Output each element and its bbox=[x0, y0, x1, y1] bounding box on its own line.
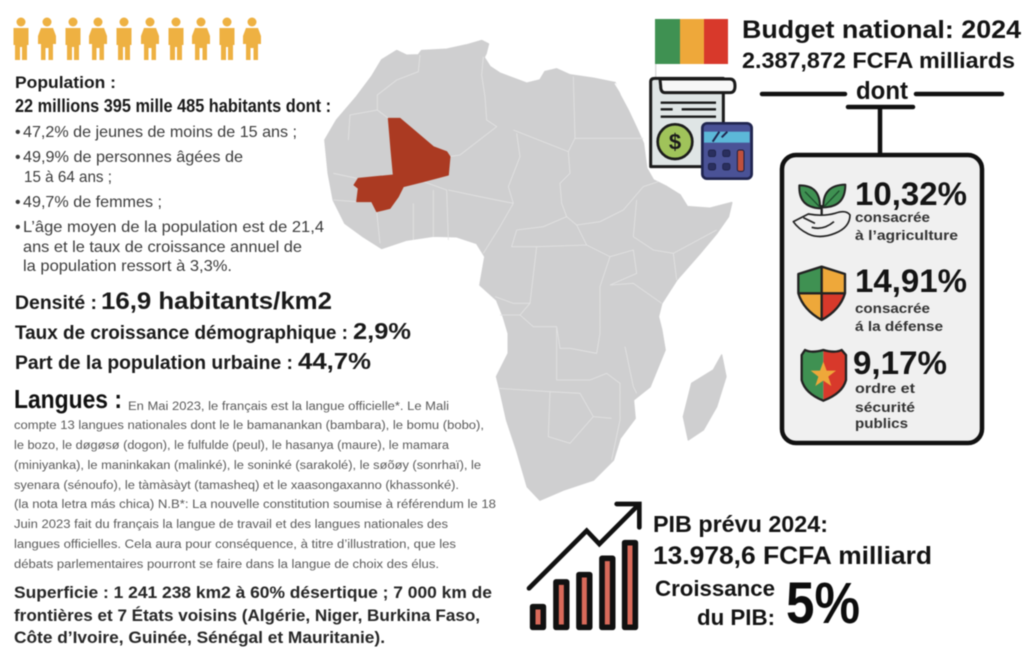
text block: superficie: Superficie : 1 241 238 km2 à 60% désertique ; 7 000 km de bbox=[14, 583, 492, 602]
icon: man bbox=[220, 18, 234, 60]
text block: population: 49,9% de personnes âgées de bbox=[23, 149, 243, 166]
stat: agriculture bbox=[855, 176, 967, 243]
icon: man bbox=[168, 18, 184, 60]
stat: security: ordre et bbox=[855, 380, 915, 396]
text block: langues: En Mai 2023, le français est la langue officielle*. Le Mali bbox=[128, 401, 449, 413]
text block: langues: débats parlementaires pourront se faire dans la langue de choix des élus. bbox=[14, 559, 439, 571]
stat: agriculture: consacrée bbox=[855, 209, 930, 225]
icon: man bbox=[14, 18, 28, 60]
icon: defense shield bbox=[798, 267, 845, 320]
text block: superficie: frontières et 7 États voisins (Algérie, Niger, Burkina Faso, bbox=[14, 606, 480, 625]
icon: woman bbox=[192, 18, 210, 60]
heading: budget national: 2.387,872 FCFA milliards bbox=[742, 48, 1015, 73]
stat: defense: consacrée bbox=[855, 300, 930, 316]
text block: langues: Juin 2023 fait du français la langue de travail et des langues nationales des bbox=[14, 519, 448, 531]
text block: langues: syenara (sénoufo), le tàmàsàyt (tamasheq) et le xaasongaxanno (khassonké). bbox=[14, 480, 459, 492]
panel: budget shares bbox=[782, 155, 982, 443]
icons: row of people bbox=[14, 18, 261, 60]
stat: agriculture: 10,32% bbox=[855, 176, 967, 212]
text block: population: la population ressort à 3,3%. bbox=[23, 258, 232, 275]
icon: budget document and calculator: $ bbox=[669, 129, 681, 154]
stat: security bbox=[853, 345, 947, 431]
text block: population: ans et le taux de croissance annuel de bbox=[23, 239, 302, 256]
text block: langues: compte 13 langues nationales dont le le bamanankan (bambara), le bomu (bobo), bbox=[14, 420, 484, 432]
text block: population: • bbox=[15, 219, 21, 236]
text block: population: • bbox=[15, 149, 21, 166]
connector: dont bbox=[762, 77, 1002, 155]
stat: security: 9,17% bbox=[853, 345, 947, 381]
stat: security: publics bbox=[855, 415, 908, 431]
text block: population: Population : bbox=[15, 73, 116, 92]
icon: security badge bbox=[802, 350, 846, 401]
stat: security: sécurité bbox=[855, 399, 915, 415]
text block: langues: (la nota letra más chica) N.B*: La nouvelle constitution soumise à référendum le 18 bbox=[14, 499, 496, 511]
text block: PIB: 13.978,6 FCFA milliard bbox=[653, 542, 932, 570]
text block: population: 15 à 64 ans ; bbox=[24, 169, 112, 186]
stat: part de la population urbaine bbox=[15, 348, 371, 374]
text block: population: 22 millions 395 mille 485 habitants dont : bbox=[15, 96, 331, 116]
heading: budget national bbox=[742, 16, 1021, 73]
stat: taux de croissance démographique: 2,9% bbox=[353, 318, 411, 344]
text block: PIB: Croissance bbox=[655, 576, 775, 601]
stat: taux de croissance démographique: Taux de croissance démographique : bbox=[15, 323, 348, 344]
text block: population: 49,7% de femmes ; bbox=[23, 194, 162, 211]
icon: man bbox=[66, 18, 80, 60]
text block: superficie: Côte d’Ivoire, Guinée, Sénégal et Mauritanie). bbox=[14, 628, 385, 647]
text block: PIB: PIB prévu 2024: bbox=[653, 511, 828, 537]
icon: woman bbox=[243, 18, 261, 60]
stat: agriculture: à l’agriculture bbox=[855, 227, 958, 243]
icon: budget document and calculator bbox=[651, 78, 752, 179]
stat: taux de croissance démographique bbox=[15, 318, 411, 344]
stat: part de la population urbaine: 44,7% bbox=[298, 348, 371, 374]
text block: PIB: du PIB: bbox=[697, 605, 775, 630]
icon: plant in hand bbox=[793, 185, 850, 237]
map: Africa bbox=[325, 41, 732, 500]
map: Madagascar bbox=[683, 355, 726, 440]
stat: part de la population urbaine: Part de la population urbaine : bbox=[15, 353, 293, 374]
icon: woman bbox=[38, 18, 56, 60]
map: continent outline bbox=[325, 41, 732, 500]
icon: woman bbox=[89, 18, 107, 60]
text block: langues bbox=[14, 384, 496, 571]
text block: superficie bbox=[14, 583, 492, 647]
text block: population: • bbox=[15, 124, 21, 141]
text block: langues: langues officielles. Cela aura pour conséquence, à titre d’illustration, que les bbox=[14, 539, 456, 551]
stat: densité bbox=[15, 288, 332, 315]
chart icon: rising bars and arrow bbox=[529, 504, 639, 627]
text block: langues: le bozo, le døgøsø (dogon), le fulfulde (peul), le hasanya (maure), le mamara bbox=[14, 440, 450, 452]
stat: densité: 16,9 habitants/km2 bbox=[101, 288, 332, 315]
icon: man bbox=[116, 18, 132, 60]
connector: dont: dont bbox=[856, 77, 909, 105]
stat: defense: á la défense bbox=[855, 318, 943, 334]
text block: population: L’âge moyen de la population est de 21,4 bbox=[23, 219, 324, 236]
text block: PIB: 5% bbox=[786, 571, 860, 636]
heading: budget national: Budget national: 2024 bbox=[742, 16, 1021, 44]
stat: densité: Densité : bbox=[15, 293, 97, 314]
map: Mali highlighted bbox=[354, 118, 450, 212]
text block: PIB bbox=[653, 511, 932, 636]
icon: Mali flag bbox=[655, 19, 728, 80]
stat: defense: 14,91% bbox=[855, 263, 967, 299]
text block: langues: (miniyanka), le maninkakan (malinké), le soninké (sarakolé), le søõøy (sonrhaï), le bbox=[14, 460, 481, 472]
text block: population: • bbox=[15, 194, 21, 211]
text block: population bbox=[15, 73, 331, 275]
text block: population: 47,2% de jeunes de moins de 15 ans ; bbox=[23, 124, 297, 141]
text block: langues: Langues : bbox=[14, 384, 122, 414]
stat: defense bbox=[855, 263, 967, 334]
icon: woman bbox=[141, 18, 159, 60]
